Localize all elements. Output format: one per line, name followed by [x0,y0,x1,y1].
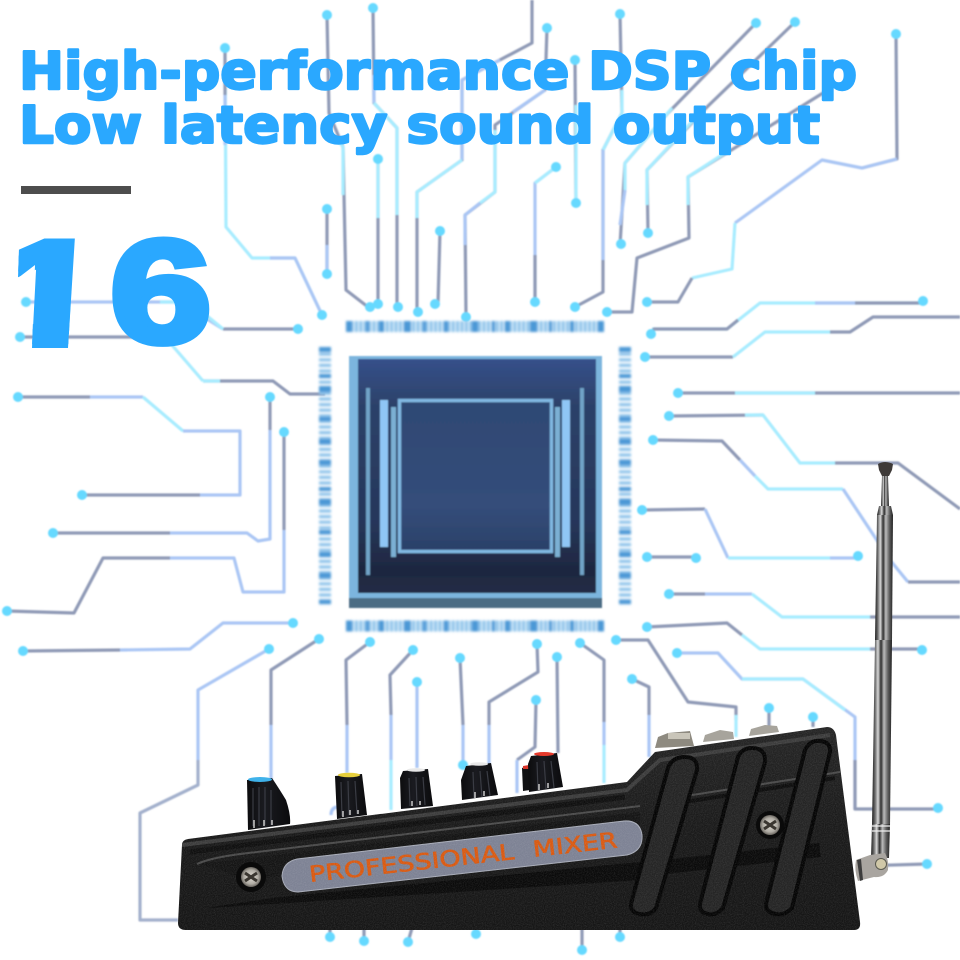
knob: white two [461,762,498,800]
title [19,42,857,156]
screw: right [756,811,784,839]
nameplate label [310,832,618,882]
nameplate label: PROFESSIONAL [308,840,516,888]
noise texture [170,720,870,935]
traces: top [225,0,897,317]
divider bar [21,186,131,194]
knob: blue [247,777,290,830]
knob: red [522,752,563,792]
number 16 [18,236,210,348]
chip pins [325,326,625,626]
traces: bottom [330,642,604,950]
body grooves [197,806,640,864]
antenna tip [878,462,893,476]
title: Low latency sound output [19,96,820,156]
rear connectors [655,725,779,748]
screw: left [236,862,266,892]
mixer [170,720,870,935]
chip [325,326,625,626]
knob: white one [400,768,433,809]
chip core [400,400,552,552]
antenna [855,462,893,881]
number 16: 6 [110,210,211,374]
antenna shaft [881,476,889,506]
chip light bars [366,388,584,575]
nameplate [282,821,642,892]
traces: left [7,302,325,920]
antenna hinge [855,853,888,881]
knob: yellow [335,773,367,819]
chip body [349,356,602,608]
title: High-performance DSP chip [19,42,857,102]
mixer body [170,720,870,935]
knobs [247,752,563,830]
nameplate label: MIXER [531,829,619,863]
ribs [631,741,830,914]
traces: right [616,303,960,937]
